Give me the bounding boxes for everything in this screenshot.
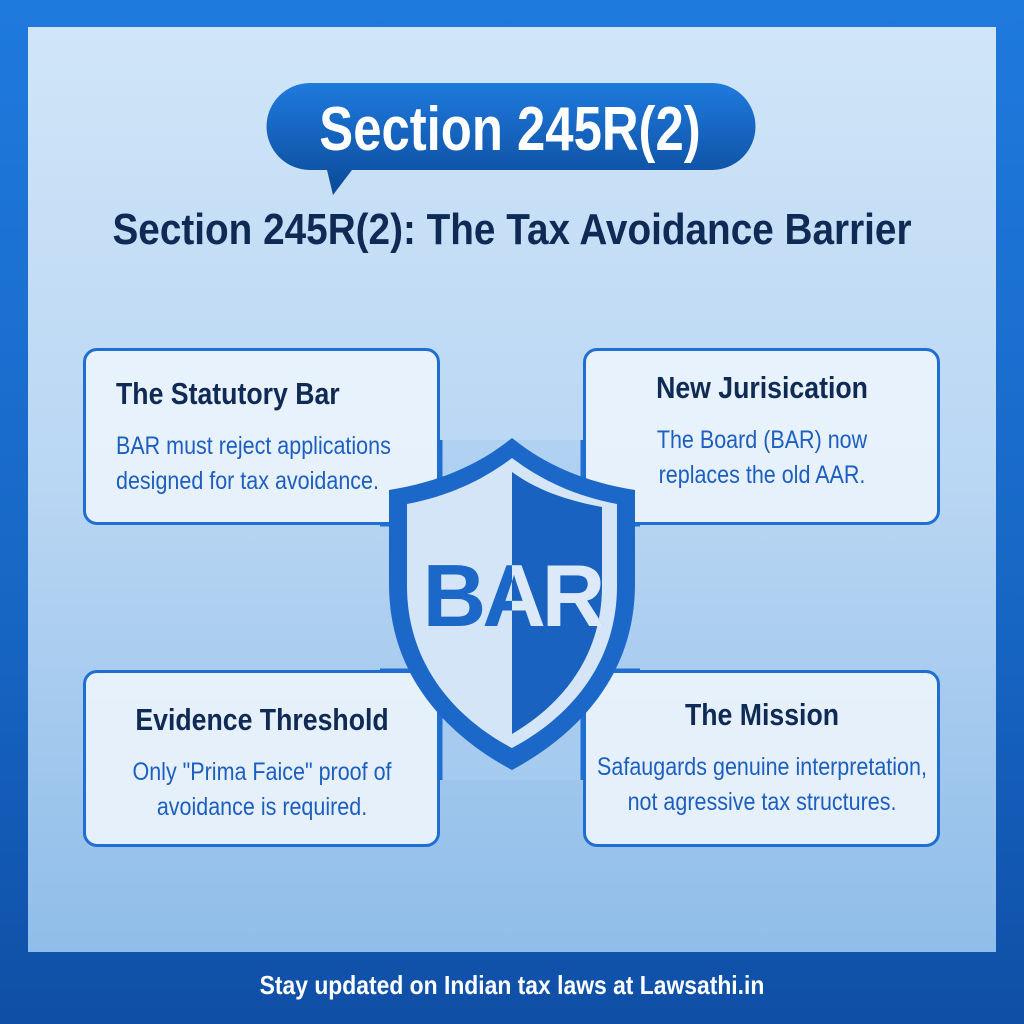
card: mission: not agressive tax structures. — [627, 788, 896, 816]
footer text: Stay updated on Indian tax laws at Lawsathi.in — [260, 970, 764, 1000]
shield icon — [389, 438, 635, 770]
card: evidence threshold: Evidence Threshold — [135, 702, 388, 737]
title bubble — [266, 83, 756, 195]
card: statutory bar — [83, 348, 440, 525]
card: evidence threshold: Only "Prima Faice" proof of — [132, 758, 391, 786]
card: statutory bar: designed for tax avoidance. — [116, 467, 379, 495]
card: mission: The Mission — [684, 697, 839, 732]
card: mission: Safaugards genuine interpretation, — [597, 753, 926, 781]
card: mission — [583, 670, 940, 847]
subtitle: Section 245R(2): The Tax Avoidance Barrier — [112, 205, 912, 254]
card: new jurisdiction: The Board (BAR) now — [656, 426, 867, 454]
card: new jurisdiction: replaces the old AAR. — [658, 461, 865, 489]
card: statutory bar: BAR must reject applications — [116, 432, 391, 460]
shield text: BAR — [423, 546, 604, 645]
card: evidence threshold — [83, 670, 440, 847]
shield icon: BAR — [423, 546, 604, 645]
card: evidence threshold: avoidance is required. — [156, 793, 367, 821]
card: statutory bar: The Statutory Bar — [116, 376, 340, 411]
card: new jurisdiction — [583, 348, 940, 525]
card: new jurisdiction: New Jurisication — [656, 370, 867, 405]
title bubble: Section 245R(2) — [319, 95, 701, 164]
